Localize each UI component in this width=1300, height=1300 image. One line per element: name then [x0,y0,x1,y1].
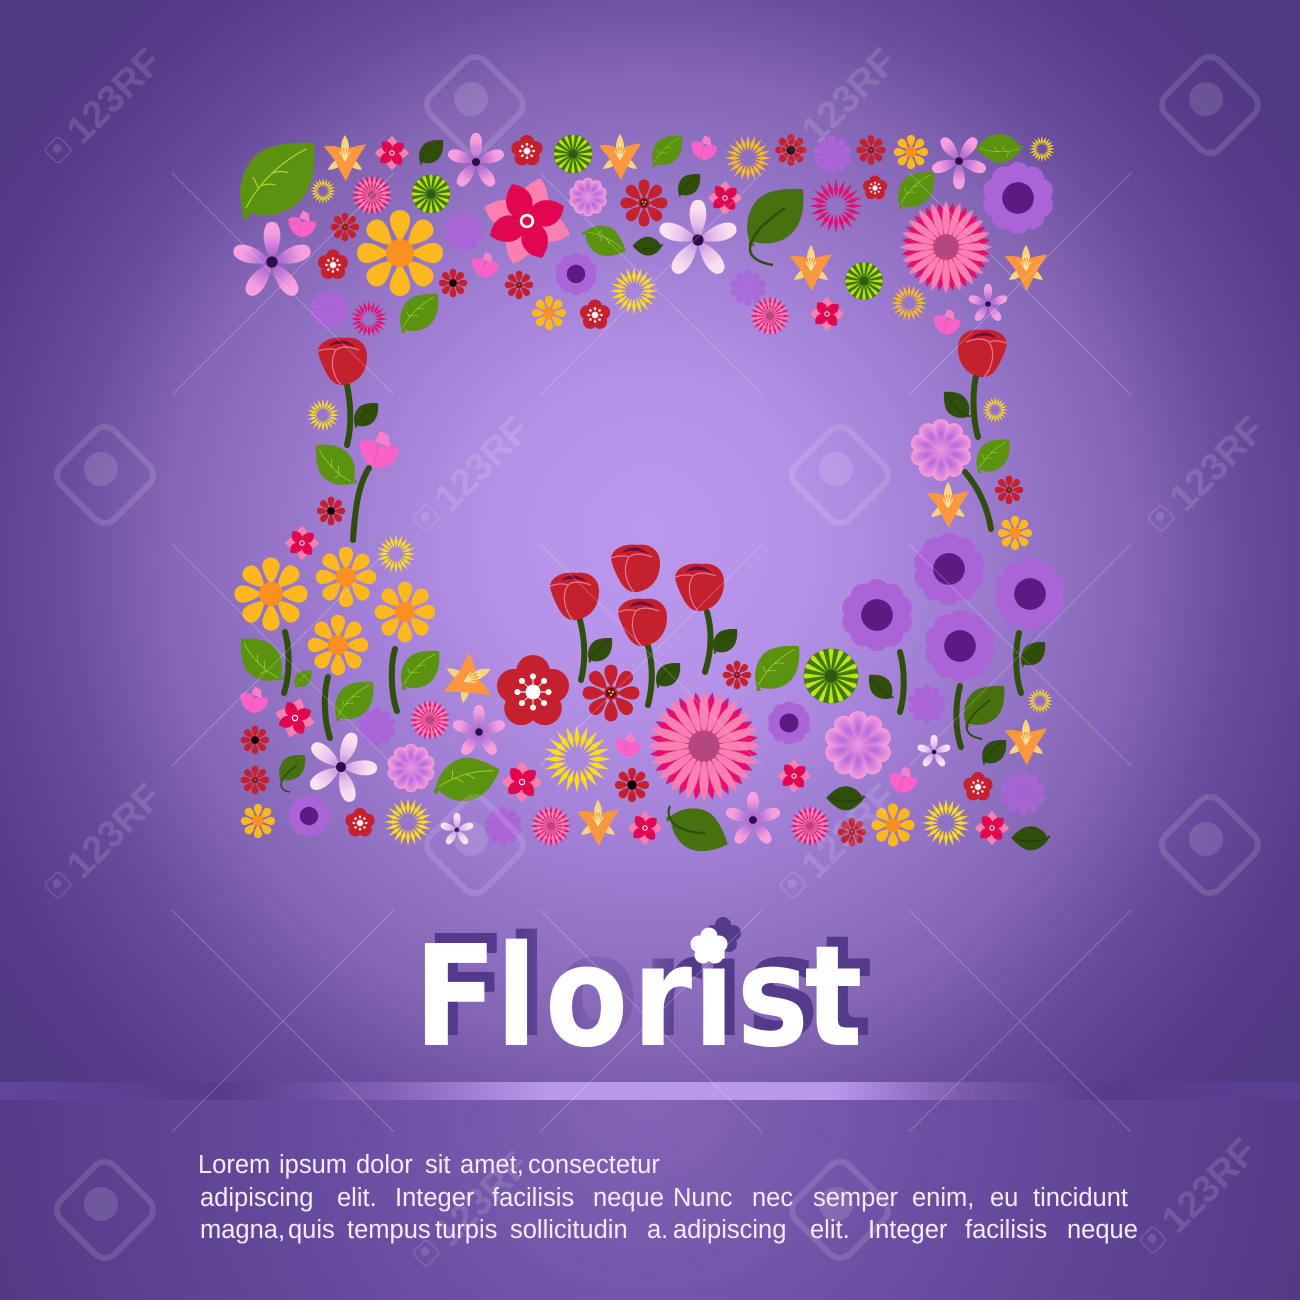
icon: leaf [401,651,439,690]
body text: adipiscing [673,1216,786,1244]
body text: enim, [912,1184,974,1212]
body text: Nunc [673,1184,733,1212]
title text: Florist [414,915,863,1078]
icon: pinwheel [285,526,319,560]
icon: plum blossom [345,808,375,836]
icon: pinwheel [271,694,319,742]
icon: red flower [723,661,751,689]
icon: big leaf [240,143,315,218]
watermark lines [172,173,1131,1132]
icon: anemone [914,533,984,605]
body text: neque [593,1184,664,1212]
icon: anemone [842,579,912,651]
icon: pink star flower [968,284,1008,323]
icon: dark leaf [944,392,971,418]
top garland [231,123,1055,339]
body text: adipiscing [200,1184,313,1212]
icon: yellow rays [384,798,432,846]
body text: Lorem [198,1151,270,1179]
icon: red flower [856,135,886,165]
icon: yellow rays [543,725,611,793]
icon: dark leaf [826,778,866,818]
icon: pink star flower [451,705,507,757]
watermark logos: 123RF [1154,1131,1265,1242]
icon: pinwheel [778,760,810,792]
icon: plum blossom [318,250,348,279]
icon: dark leaf [656,663,680,687]
icon: tulip [472,252,498,277]
body text: facilisis [492,1184,574,1212]
icon: yellow rays [1029,136,1055,162]
watermark logos: 123RF [794,41,905,152]
icon: daisy [308,615,368,675]
icon: lily [1005,245,1047,291]
icon: crimson rays [809,179,863,233]
icon: orange rays [890,284,928,322]
icon: lilac flower [568,178,608,216]
icon: large daisy [357,210,443,296]
icon: anemone [556,253,596,295]
icon: leaf [977,439,1010,473]
icon: faded mauve flower [1000,770,1046,816]
icon: daisy [375,582,435,642]
watermark logos: 123RF [1162,409,1273,520]
icon: rose [550,573,599,620]
icon: pink rays [787,803,833,849]
icon: plum blossom [963,772,993,800]
icon: pink star flower [231,222,313,299]
icon: orange rays [725,135,771,181]
body text: Integer [395,1184,475,1212]
icon: black-centred flower [615,768,649,802]
icon: pinwheel [708,181,742,215]
icon: pinwheel [502,762,542,802]
body text: ipsum [279,1151,347,1179]
icon: tulip [934,309,960,334]
icon: tulip [289,211,316,237]
icon: red flower [620,179,668,227]
body text: nec [752,1184,793,1212]
icon: big pink daisy [895,196,997,298]
icon: pink rays [747,293,793,339]
icon: leaf [400,294,438,333]
body text: turpis [435,1216,497,1244]
body text: sollicitudin [510,1216,628,1244]
icon: anemone [289,795,329,837]
icon: mauve flower [358,708,396,746]
icon: big anemone [983,162,1053,234]
icon: rose stems [580,612,711,705]
icon: white star flower [440,813,474,846]
icon: tulip [691,136,717,160]
icon: dark leaf [354,403,378,427]
icon: lily [790,245,832,291]
icon: yellow rays [310,178,336,204]
icon: red flower [838,818,866,846]
icon: plum blossom [863,176,887,199]
icon: daisy stems [284,632,397,738]
body text: eu [990,1184,1018,1212]
icon: green sunburst [804,649,858,703]
icon: daisy [872,804,914,846]
body text: amet, [460,1151,524,1179]
icon: pink star flower [446,133,506,189]
icon: large pinwheel [470,164,584,278]
icon: dark leaf [1021,642,1045,666]
icon: tulip [890,767,917,793]
icon: yellow rays [982,397,1008,423]
icon: large plum blossom [497,655,569,725]
icon: anemone stems [900,633,1021,747]
watermark logos: 123RF [59,776,170,887]
watermark logos: 123RF [427,1144,538,1255]
body text: Integer [868,1216,948,1244]
icon: dark leaf [588,638,612,662]
icon: yellow rays [376,534,416,574]
icon: rose [618,599,667,646]
icon: stem [965,472,991,529]
icon: leaf [755,646,799,691]
icon: lily [577,800,619,846]
icon: yellow rays [922,799,970,847]
icon: red flower [241,766,269,794]
icon: pinwheel [810,297,844,331]
icon: leaf [652,136,682,167]
icon: tulip with stem [353,431,399,540]
body text: consectetur [528,1151,660,1179]
body text: neque [1067,1216,1138,1244]
icon: pinwheel [975,811,1009,845]
left column [306,338,399,540]
icon: pink rays [407,697,453,743]
body text: a. [647,1216,668,1244]
icon: mauve flower [484,807,522,845]
body text: tincidunt [1033,1184,1128,1212]
icon: mauve flower [444,211,484,251]
icon: yellow rays [306,398,340,432]
icon: lily [1005,719,1047,765]
icon: leaf [976,123,1024,172]
icon: tulip [241,687,268,713]
bottom-right anemones [842,533,1065,816]
icon: leaf [898,172,934,209]
icon: black-centred flower [317,497,345,525]
icon: lilac flower [823,711,893,779]
icon: plum blossom [511,135,543,165]
icon: lily [927,482,969,528]
icon: toothed leaf with stem [665,799,728,861]
icon: green sunburst [554,135,592,173]
icon: lily [433,647,501,713]
icon: dark leaf [678,174,700,196]
body text: magna, [200,1216,285,1244]
icon: tulip [615,733,641,757]
icon: leaf [582,219,626,263]
icon: dark leaf [869,675,893,699]
icon: mauve flower [908,685,946,723]
icon: leaf [432,746,500,815]
icon: leaf [335,682,373,721]
icon: lilac flower [909,419,973,481]
icon: dark leaf [982,740,1006,764]
body text: sit [425,1151,450,1179]
body text: dolor [356,1151,413,1179]
icon: pink rays [528,803,574,849]
icon: green sunburst [412,175,450,213]
icon: mauve flower [812,135,852,175]
icon: lily [324,135,366,181]
floor panel [0,1098,1300,1300]
icon: daisy [241,804,275,838]
bottom-left daisies [234,526,522,846]
icon: faded mauve flower [730,270,766,306]
icon: white star flower [295,720,388,811]
icon: rose with stem [318,338,367,445]
icon: dark leaf [713,629,737,653]
icon: leaf [241,639,284,681]
icon: red flower [331,213,359,241]
body text: elit. [337,1184,377,1212]
icon: rose [611,545,660,592]
icon: pink star flower [724,792,782,846]
icon: daisy [532,296,566,330]
flower frame [231,123,1065,861]
icon: pink rays [349,172,395,218]
icon: dark leaf [1011,818,1051,858]
icon: black-centred flower [241,726,269,754]
icon: daisy [316,547,376,607]
icon: anemone [995,558,1065,630]
watermark logos: 123RF [794,776,905,887]
body text: elit. [810,1216,850,1244]
icon: lily [599,134,641,180]
watermark logos: 123RF [427,409,538,520]
icon: pinwheel [628,811,662,845]
icon: dark leaf [419,140,443,164]
icon: toothed leaf with stem [964,686,1004,739]
title: Florist [414,905,873,1078]
body text: semper [813,1184,899,1212]
icon: plum blossom [580,300,610,329]
icon: toothed leaf [747,189,804,265]
icon: rose with stem [958,330,1007,437]
right column [909,330,1032,550]
centre bouquet [497,545,1051,861]
icon: red flower [505,271,533,299]
watermark logos: 123RF [59,41,170,152]
icon: red flower [995,476,1023,504]
icon: dark leaf [632,230,664,262]
icon: crimson rays [350,300,388,338]
body text: quis [288,1216,335,1244]
icon: black-centred flower [439,269,467,297]
shadow flower [705,917,741,952]
icon: leaf [316,445,357,485]
white flower on the i [690,928,728,964]
icon: small leaf [295,670,312,688]
icon: white star flower [917,735,951,768]
icon: yellow rays [1027,688,1053,714]
icon: white star flower [657,200,739,277]
icon: anemone [768,702,810,744]
icon: toothed leaf [279,755,305,792]
icon: daisy [998,516,1032,550]
icon: mauve flower [309,289,349,329]
icon: daisy [894,135,928,169]
icon: anemone [925,610,995,682]
icon: lilac flower [386,744,436,792]
icon: big pink daisy [642,684,766,808]
body text: facilisis [965,1216,1047,1244]
icon: green sunburst [845,262,883,300]
shelf light band [0,1082,1300,1100]
icon: pink star flower [930,135,988,189]
icon: red flower [583,665,639,721]
icon: red flower [775,134,807,166]
icon: rose [675,564,724,611]
icon: daisy [234,557,308,631]
title shadow: Florist [424,905,873,1068]
icon: yellow rays [610,267,658,315]
icon: pinwheel flower [375,136,409,170]
body text: tempus [347,1216,431,1244]
